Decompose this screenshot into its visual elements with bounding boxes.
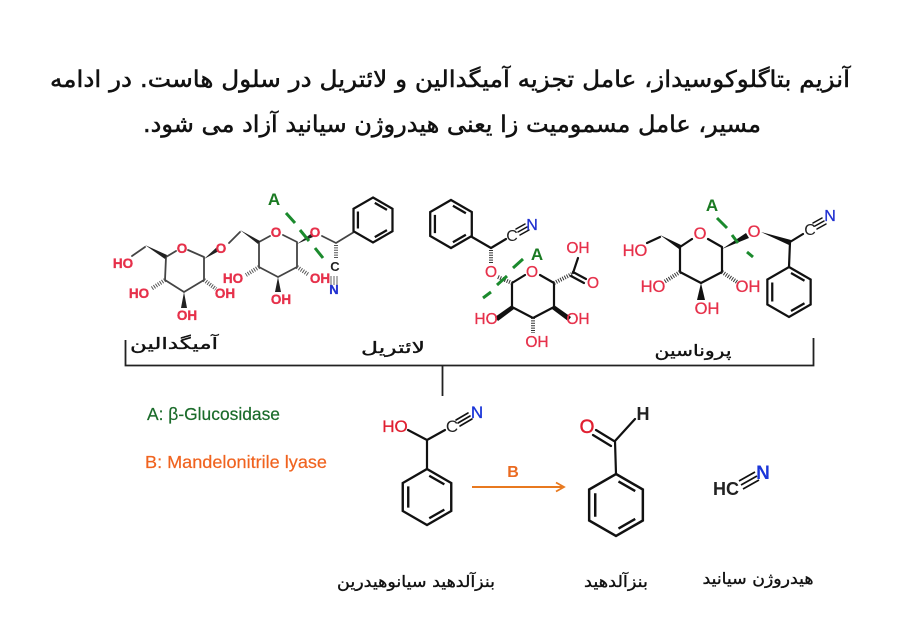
molecule: prunasin: O [694, 225, 707, 243]
molecule: amygdalin: OH [271, 292, 291, 307]
molecule: laetrile: O [485, 264, 497, 281]
label: hydrogen cyanide: هیدروژن سیانید [702, 569, 814, 589]
molecule: amygdalin: HO [223, 271, 243, 286]
molecule: benzaldehyde cyanohydrin: N [471, 403, 483, 422]
molecule: amygdalin: O [310, 225, 320, 240]
title: مسیر، عامل مسمومیت زا یعنی هیدروژن سیانید آزاد می شود. [143, 110, 761, 138]
molecule: amygdalin: HO [113, 256, 133, 271]
label: laetrile: لائتریل [361, 338, 425, 358]
molecule: amygdalin: O [177, 241, 187, 256]
molecule: hydrogen cyanide: HC [713, 479, 739, 499]
legend: enzymes: B: Mandelonitrile lyase [145, 452, 327, 472]
molecule: benzaldehyde [580, 404, 650, 536]
cleavage marker A: prunasin: A [706, 196, 718, 215]
molecule: prunasin: OH [736, 278, 760, 296]
molecule: laetrile: OH [525, 334, 549, 351]
cleavage marker A: amygdalin: A [268, 190, 280, 209]
title [50, 65, 852, 138]
label: prunasin: پروناسین [654, 341, 732, 361]
molecule: laetrile: N [526, 217, 538, 234]
molecule: amygdalin: OH [177, 308, 197, 323]
label: amygdalin: آمیگدالین [130, 334, 220, 354]
molecule: benzaldehyde cyanohydrin: HO [382, 417, 408, 436]
legend: enzymes: A: β-Glucosidase [147, 404, 280, 424]
molecule: prunasin: OH [695, 300, 719, 318]
molecule: hydrogen cyanide: N [756, 463, 770, 484]
molecule: amygdalin: C [330, 259, 340, 274]
molecule: prunasin: HO [641, 278, 666, 296]
molecule: amygdalin: OH [310, 271, 330, 286]
cleavage marker A: amygdalin [268, 190, 323, 258]
molecule: prunasin: N [824, 208, 836, 225]
molecule: benzaldehyde cyanohydrin [382, 403, 483, 525]
legend: enzymes [145, 404, 327, 472]
molecule: hydrogen cyanide [713, 463, 770, 499]
molecule: laetrile: HO [474, 311, 498, 328]
molecule: amygdalin [113, 198, 392, 323]
molecule: benzaldehyde: H [636, 404, 650, 424]
cleavage marker A: prunasin [706, 196, 753, 257]
molecule: laetrile [430, 200, 599, 351]
molecule: amygdalin: O [271, 225, 281, 240]
molecule: amygdalin: N [329, 282, 339, 297]
cleavage marker A: laetrile: A [531, 245, 543, 264]
molecule: laetrile: OH [566, 240, 590, 257]
molecule: benzaldehyde: O [580, 417, 594, 438]
molecule: laetrile: O [526, 264, 538, 281]
molecule: amygdalin: OH [215, 286, 235, 301]
molecule: prunasin: C [804, 222, 816, 239]
molecule: amygdalin: O [216, 241, 226, 256]
bracket joining the three precursors [126, 338, 814, 396]
label: benzaldehyde: بنزآلدهید [584, 572, 648, 592]
molecule: prunasin: HO [623, 242, 648, 260]
cleavage marker A: laetrile [483, 245, 543, 298]
molecule: laetrile: OH [566, 311, 590, 328]
molecule: prunasin: O [748, 223, 761, 241]
molecule: laetrile: O [587, 275, 599, 292]
label: benzaldehyde cyanohydrin: بنزآلدهید سیانوهیدرین [337, 572, 495, 592]
arrow: enzyme B reaction: B [507, 464, 519, 481]
molecule: benzaldehyde cyanohydrin: C [446, 417, 458, 436]
molecule: prunasin [623, 208, 836, 318]
molecule: amygdalin: HO [129, 286, 149, 301]
arrow: enzyme B reaction [472, 464, 564, 492]
molecule: laetrile: C [506, 228, 518, 245]
title: آنزیم بتاگلوکوسیداز، عامل تجزیه آمیگدالین و لائتریل در سلول هاست. در ادامه [50, 65, 852, 93]
